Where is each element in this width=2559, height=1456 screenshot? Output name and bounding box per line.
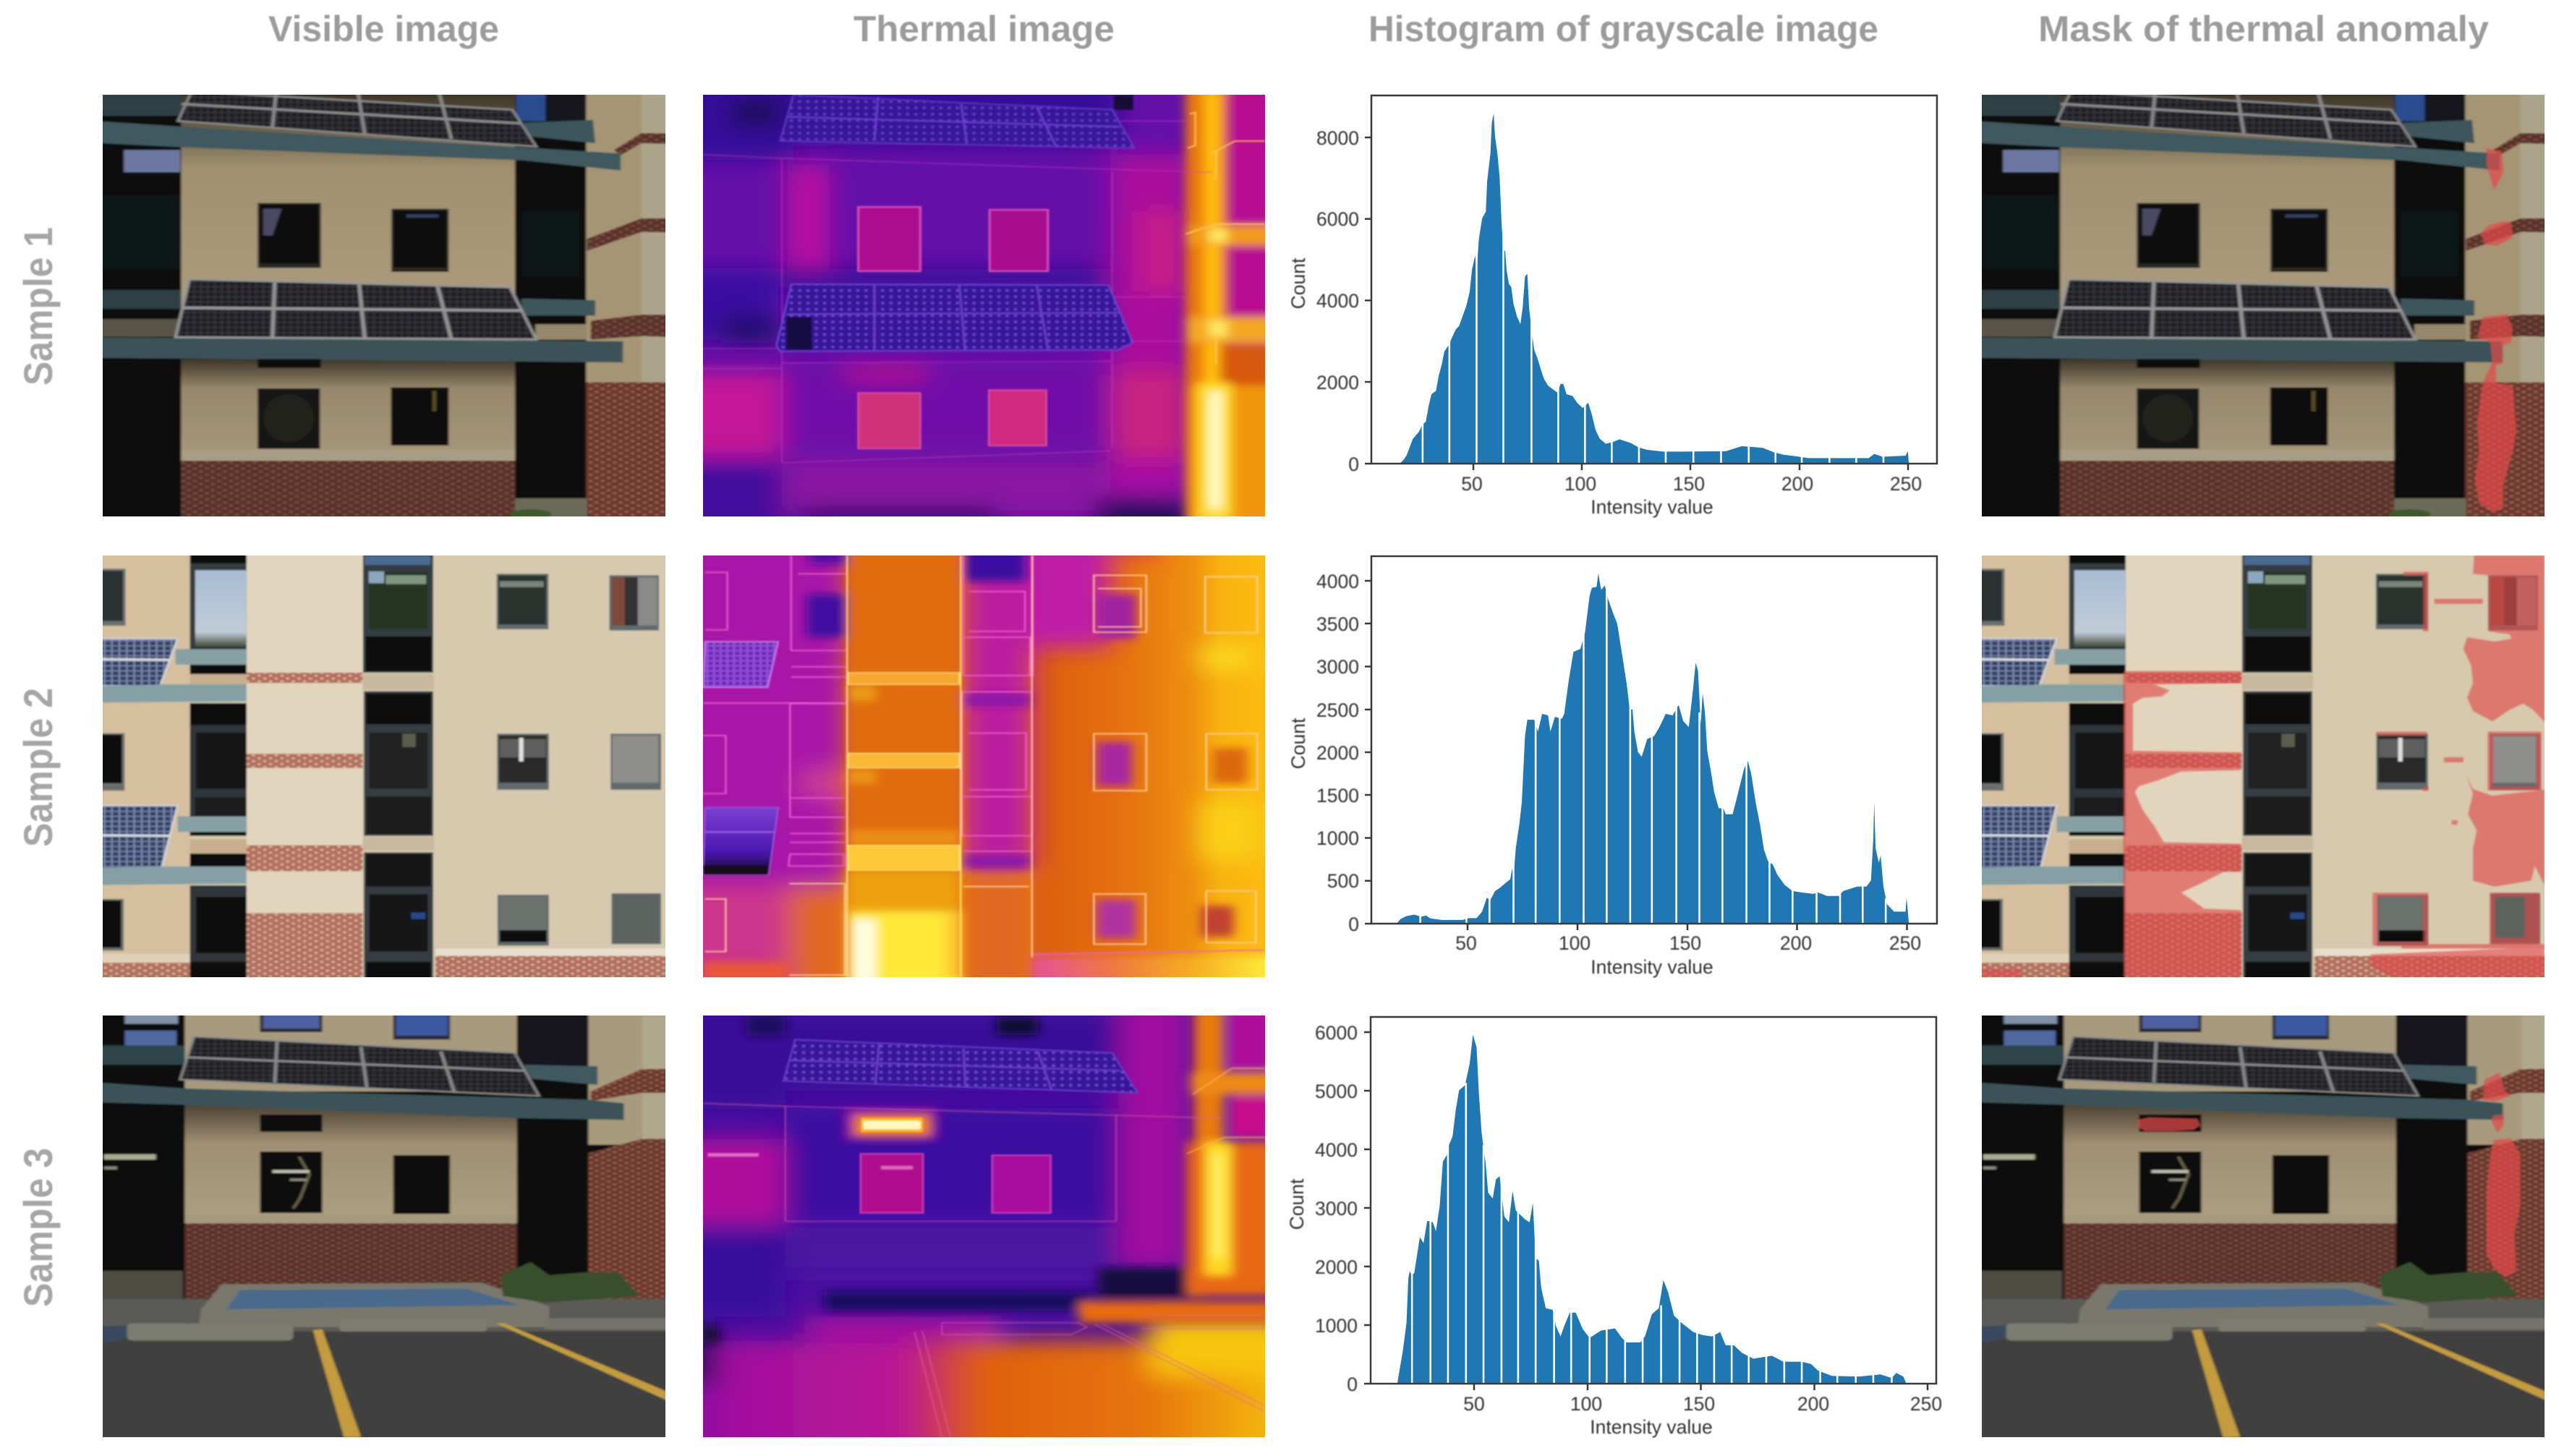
y tick labels: 2000 <box>1316 372 1359 393</box>
y tick labels: 1000 <box>1316 827 1359 849</box>
title: mask column: Mask of thermal anomaly <box>2038 9 2489 49</box>
x tick labels: 250 <box>1890 473 1922 495</box>
x tick labels: 250 <box>1889 932 1921 954</box>
y tick labels: 8000 <box>1316 127 1359 149</box>
axis ticks <box>1365 581 1907 930</box>
y tick labels: 0 <box>1348 914 1359 935</box>
y tick labels: 6000 <box>1316 208 1359 230</box>
axis ticks <box>1365 137 1908 470</box>
title: thermal image column: Thermal image <box>853 9 1115 49</box>
x axis title: Intensity value <box>1590 1416 1713 1438</box>
y tick labels <box>1316 571 1359 935</box>
y tick labels: 1500 <box>1316 785 1359 806</box>
row label: sample 2: Sample 2 <box>15 688 61 847</box>
histogram chart: sample 2 <box>1287 556 1937 978</box>
row label: sample 1: Sample 1 <box>15 227 61 386</box>
y tick labels: 4000 <box>1316 571 1359 592</box>
x axis title: Intensity value <box>1591 956 1713 978</box>
axes frame <box>1371 1017 1936 1384</box>
title: visible image column: Visible image <box>268 9 499 49</box>
y tick labels: 2000 <box>1316 742 1359 764</box>
y axis title: Count <box>1287 718 1309 769</box>
histogram chart: sample 1 <box>1287 95 1937 518</box>
y tick labels: 3000 <box>1316 656 1359 678</box>
mask image: sample 1 <box>1949 68 2559 546</box>
axes frame <box>1371 95 1937 464</box>
thermal image: sample 2 <box>703 555 1265 977</box>
x tick labels <box>1455 932 1921 954</box>
y tick labels: 0 <box>1347 1374 1358 1395</box>
y tick labels: 3000 <box>1315 1198 1358 1219</box>
y tick labels: 6000 <box>1315 1022 1358 1044</box>
x tick labels: 250 <box>1910 1393 1942 1415</box>
y tick labels: 4000 <box>1316 290 1359 312</box>
anomaly overlay: sample 3 <box>2137 1072 2521 1277</box>
y tick labels: 5000 <box>1315 1081 1358 1102</box>
mask image: sample 3 <box>1925 991 2559 1456</box>
histogram chart: sample 3 <box>1286 1017 1942 1438</box>
y tick labels: 1000 <box>1315 1315 1358 1337</box>
title: histogram column: Histogram of grayscale image <box>1368 9 1878 49</box>
y tick labels <box>1316 127 1359 475</box>
x tick labels: 100 <box>1564 473 1596 495</box>
thermal image: sample 3 <box>703 1016 1265 1437</box>
thermal image: sample 1 <box>703 95 1265 516</box>
x tick labels: 50 <box>1455 932 1477 954</box>
mask image: sample 2 <box>1923 535 2559 1008</box>
y tick labels: 500 <box>1327 870 1359 892</box>
x tick labels: 200 <box>1780 932 1812 954</box>
x tick labels: 150 <box>1683 1393 1715 1415</box>
x tick labels <box>1463 1393 1942 1415</box>
x tick labels: 100 <box>1570 1393 1602 1415</box>
y tick labels: 2000 <box>1315 1256 1358 1278</box>
x axis title: Intensity value <box>1591 496 1713 518</box>
visible image: sample 3 <box>103 1016 665 1437</box>
y axis title: Count <box>1287 257 1309 309</box>
x tick labels: 50 <box>1461 473 1483 495</box>
x tick labels: 50 <box>1463 1393 1485 1415</box>
axes frame <box>1371 556 1937 924</box>
x tick labels: 200 <box>1797 1393 1829 1415</box>
y axis title: Count <box>1286 1178 1308 1230</box>
visible image: sample 1 <box>103 95 665 516</box>
y tick labels: 4000 <box>1315 1139 1358 1161</box>
y tick labels: 3500 <box>1316 613 1359 635</box>
y tick labels: 0 <box>1348 454 1359 475</box>
anomaly overlay: sample 2 <box>1982 555 2545 977</box>
x tick labels: 200 <box>1781 473 1813 495</box>
x tick labels <box>1461 473 1922 495</box>
x tick labels: 100 <box>1559 932 1591 954</box>
y tick labels: 2500 <box>1316 699 1359 721</box>
x tick labels: 150 <box>1673 473 1705 495</box>
anomaly overlay: sample 1 <box>2474 148 2518 512</box>
y tick labels <box>1315 1022 1358 1395</box>
row label: sample 3: Sample 3 <box>15 1148 61 1307</box>
axis ticks <box>1364 1032 1928 1390</box>
visible image: sample 2 <box>103 555 665 977</box>
x tick labels: 150 <box>1669 932 1701 954</box>
